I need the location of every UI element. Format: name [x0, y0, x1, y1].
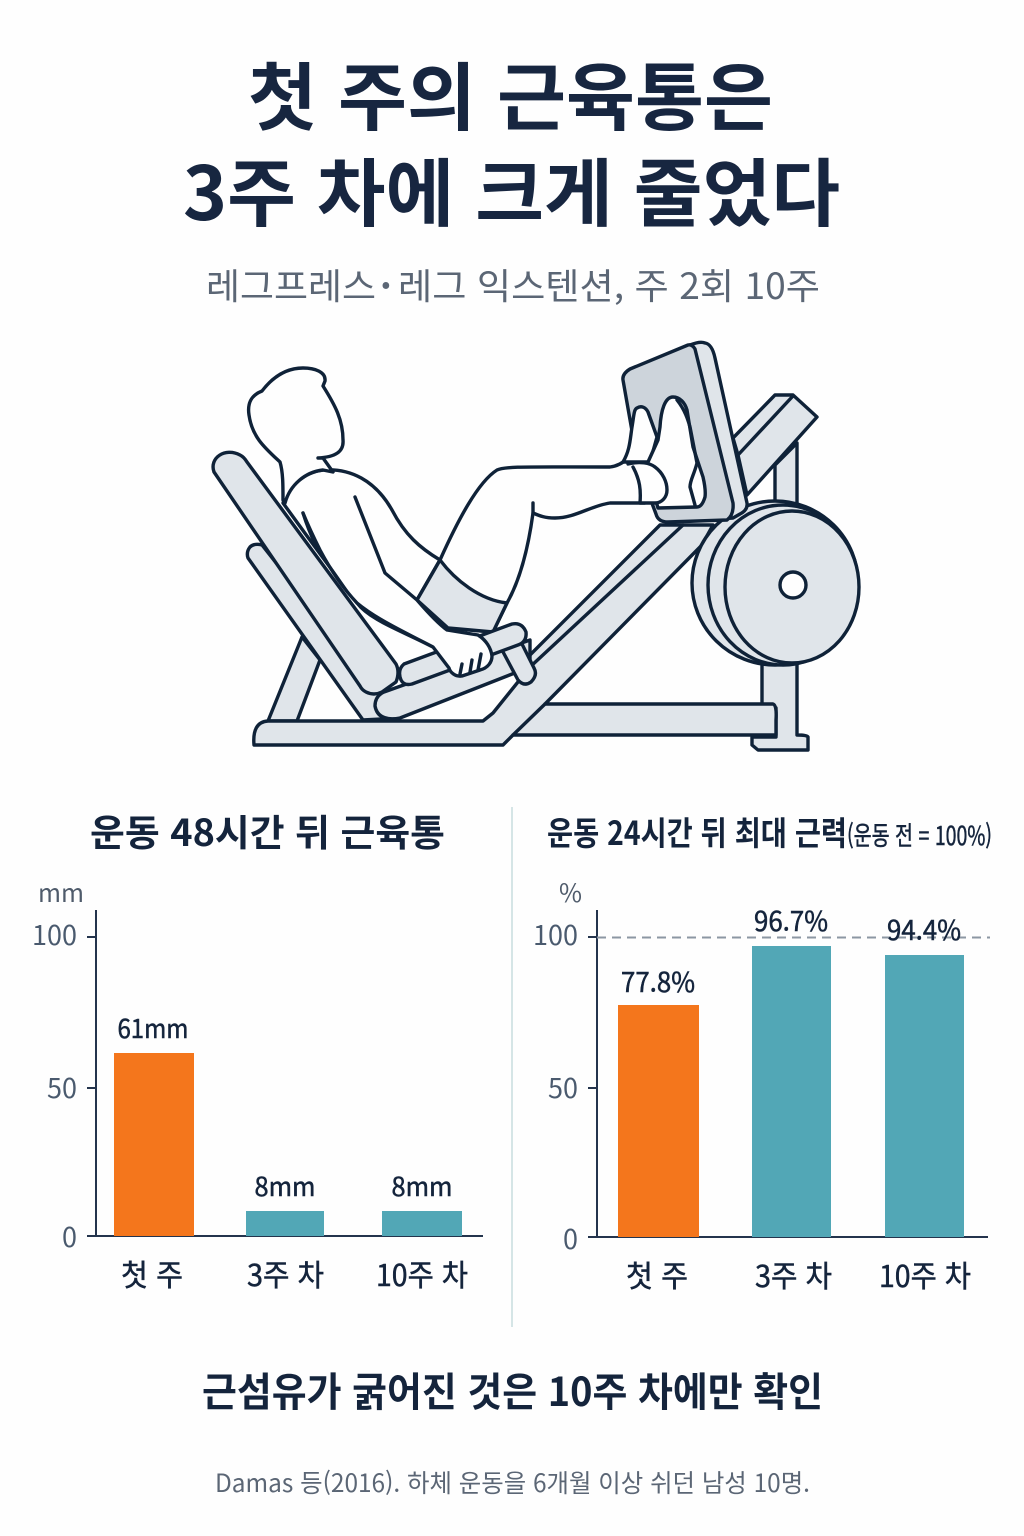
subtitle: · [380, 258, 392, 310]
right chart tick labels [533, 914, 578, 1257]
bar: first week 61mm [114, 1009, 194, 1236]
bar: week 10 8mm: 8mm [392, 1167, 452, 1204]
right chart heading: 운동 24시간 뒤 최대 근력 [547, 807, 847, 855]
right chart tick labels: 50 [548, 1067, 578, 1106]
frame: rail and base [254, 525, 776, 745]
leg handle [502, 640, 535, 684]
title: 3주 차에 크게 줄었다 [183, 135, 840, 242]
bar: first week 77.8% [618, 961, 699, 1237]
left chart category labels: 10주 차 [376, 1251, 468, 1295]
divider [511, 807, 513, 1327]
bar: week 3 8mm: 8mm [254, 1167, 316, 1204]
subtitle: 레그 익스텐션, 주 2회 10주 [398, 258, 820, 310]
figure: shorts [417, 560, 507, 632]
backrest pad [213, 452, 398, 694]
subtitle: 레그프레스 [206, 258, 376, 310]
frame: rear post [752, 443, 808, 750]
arm and hand [303, 497, 492, 676]
foot plate [690, 342, 747, 520]
left chart tick labels: 50 [47, 1067, 77, 1106]
right chart unit: % [559, 874, 582, 910]
left bar chart: muscle soreness [32, 874, 483, 1295]
right chart baseline reference [597, 936, 990, 938]
bar: first week 61mm: 61mm [118, 1009, 188, 1046]
bar: week 3 8mm [246, 1167, 324, 1236]
bar: week 10 94.4% [885, 909, 964, 1237]
bar: week 3 96.7% [752, 900, 831, 1237]
right chart axes [588, 910, 988, 1237]
left chart category labels: 3주 차 [247, 1251, 324, 1295]
title [183, 39, 840, 242]
source note: Damas 등(2016). 하체 운동을 6개월 이상 쉬던 남성 10명. [215, 1464, 810, 1500]
backrest frame [247, 544, 400, 720]
bar: week 10 94.4%: 94.4% [887, 909, 961, 948]
bar: week 10 8mm [382, 1167, 462, 1236]
figure: shirt details [303, 513, 370, 562]
bar: week 3 96.7%: 96.7% [754, 900, 828, 939]
subtitle [206, 258, 820, 310]
illustration: leg press machine [213, 342, 859, 750]
title: 첫 주의 근육통은 [248, 39, 773, 146]
right chart tick labels: 100 [533, 914, 578, 953]
left chart unit: mm [38, 874, 84, 910]
left chart category labels [121, 1251, 468, 1295]
takeaway: 근섬유가 굵어진 것은 10주 차에만 확인 [202, 1360, 823, 1418]
right chart category labels: 첫 주 [626, 1252, 688, 1296]
figure: torso [283, 470, 447, 647]
right chart category labels: 3주 차 [755, 1252, 832, 1296]
ankle and sock [628, 463, 667, 503]
left chart axes [87, 910, 483, 1236]
foot and shoes [623, 407, 657, 462]
figure: head [249, 368, 343, 503]
frame: upper rail end [733, 395, 817, 495]
right chart category labels [626, 1252, 971, 1296]
right bar chart: peak strength [533, 874, 990, 1296]
weight plates [692, 501, 859, 665]
left chart tick labels: 100 [32, 914, 77, 953]
sled arm [375, 640, 530, 719]
figure: leg [417, 458, 645, 632]
rail inner lines [513, 397, 792, 735]
frame: rear support legs [268, 637, 320, 721]
left chart tick labels [32, 914, 77, 1255]
left chart heading: 운동 48시간 뒤 근육통 [90, 803, 445, 857]
right chart category labels: 10주 차 [879, 1252, 971, 1296]
bar: first week 77.8%: 77.8% [621, 961, 695, 1000]
right chart tick labels: 0 [563, 1218, 578, 1257]
left chart category labels: 첫 주 [121, 1251, 183, 1295]
left chart tick labels: 0 [62, 1216, 77, 1255]
